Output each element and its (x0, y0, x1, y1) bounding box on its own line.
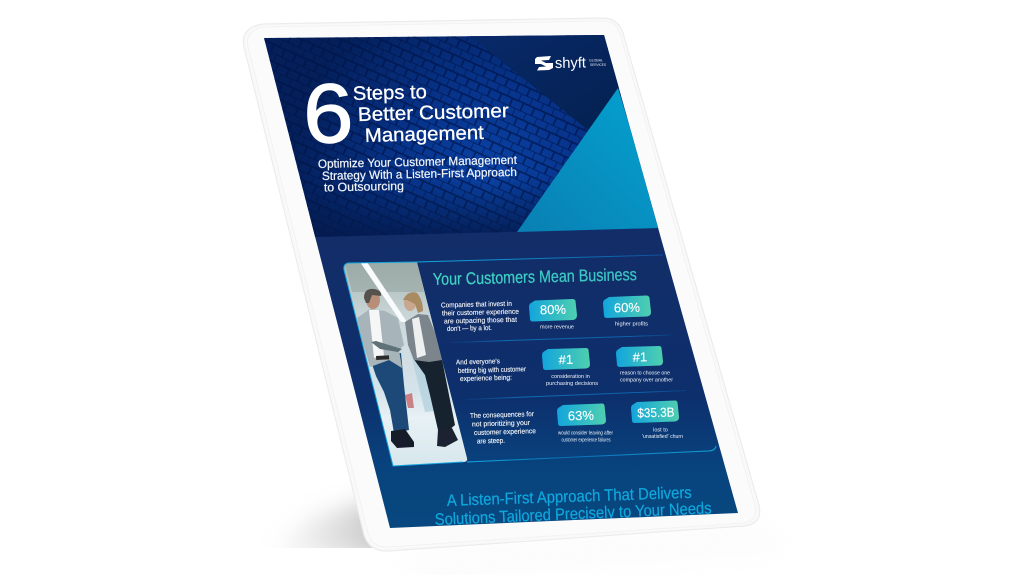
stat: 80% more revenue (529, 299, 577, 330)
stat: #1 consideration in purchasing decisions: #1 (558, 352, 573, 367)
row 3 text: The consequences for (470, 411, 535, 420)
stat: #1 consideration in purchasing decisions: purchasing decisions (546, 381, 598, 387)
divider line (466, 390, 686, 400)
panel: your customers mean business (340, 255, 716, 470)
closing heading: Solutions Tailored Precisely to Your Needs (434, 499, 712, 529)
stat: $35.3B lost to unsatisfied churn (631, 400, 683, 440)
woman head (404, 300, 416, 311)
stat: 60% higher profits: 60% (614, 300, 641, 315)
heading: Better Customer (358, 100, 510, 126)
stat: #1 reason to choose one company over another (616, 346, 673, 384)
row 1 text (441, 301, 519, 333)
row 1 text: Companies that invest in (441, 301, 512, 309)
stat: #1 reason to choose one company over another: company over another (620, 378, 673, 384)
row 2 text: And everyone's (456, 358, 500, 366)
stat: $35.3B lost to unsatisfied churn: lost to (653, 428, 668, 434)
row 2 text: betting big with customer (458, 366, 527, 375)
man shirt (369, 310, 384, 358)
heading: Management (365, 122, 485, 147)
stat: #1 reason to choose one company over another: reason to choose one (620, 370, 670, 376)
row 1 text: their customer experience (442, 309, 519, 317)
tablet mockup scene (243, 18, 760, 552)
woman (403, 292, 458, 447)
logo wordmark: shyft (555, 54, 587, 72)
man head (366, 295, 380, 309)
stat: 63% would consider leaving (557, 404, 613, 444)
row 2 text: experience being: (460, 375, 512, 383)
logo tagline (589, 59, 606, 66)
stat: 63% would consider leaving: would consider leaving after (557, 430, 613, 436)
panel: header banner (262, 32, 662, 237)
header navy wedge (470, 33, 620, 130)
tablet screen (260, 32, 750, 535)
man shoes (391, 429, 414, 448)
logo: shyft (535, 56, 606, 71)
woman blouse (412, 317, 426, 358)
stat: 80% more revenue: more revenue (540, 324, 574, 330)
stat: $35.3B lost to unsatisfied churn: $35.3B (637, 404, 675, 421)
divider line (451, 335, 671, 342)
stat: #1 consideration in purchasing decisions: consideration in (551, 374, 590, 380)
woman trousers (413, 354, 455, 432)
numeral 6: 6 (302, 66, 354, 161)
closing heading (434, 484, 712, 529)
heading: Steps to (353, 81, 427, 105)
panel edge lines (417, 255, 716, 462)
man (357, 289, 414, 448)
subheading (318, 156, 517, 192)
stat: 63% would consider leaving: 63% (568, 408, 595, 423)
row 3 text: are steep. (477, 438, 505, 445)
subheading: Strategy With a Listen-First Approach (322, 165, 517, 183)
stat: 80% more revenue: 80% (540, 302, 567, 317)
row 3 text: not prioritizing your (472, 420, 531, 428)
stat: #1 reason to choose one company over another: #1 (632, 349, 647, 365)
photo outline (344, 262, 463, 466)
stat: 60% higher profits (603, 296, 651, 328)
photo: two colleagues walking with a tablet (340, 260, 470, 470)
heading (354, 86, 508, 145)
stat: $35.3B lost to unsatisfied churn: 'unsatisfied' churn (642, 434, 683, 440)
held tablet (371, 341, 402, 352)
subheading: Optimize Your Customer Management (318, 153, 518, 171)
tablet body (243, 18, 760, 551)
tablet shadow (293, 496, 372, 548)
row 1 text: are outpacing those that (444, 317, 517, 325)
closing heading: A Listen-First Approach That Delivers (447, 484, 692, 510)
row 2 text (456, 358, 527, 383)
logo tagline: SERVICES (590, 63, 607, 67)
title: Your Customers Mean Business (433, 265, 637, 289)
logo icon (535, 56, 553, 70)
row 3 text: customer experience (474, 428, 536, 437)
row 3 text (470, 411, 536, 445)
screen body background (312, 225, 738, 528)
woman shoes (437, 428, 458, 447)
stat: 63% would consider leaving: customer experience failures (562, 438, 611, 444)
header patterned background (262, 32, 662, 237)
man jacket (357, 309, 404, 368)
subheading: to Outsourcing (324, 179, 404, 194)
woman jacket (405, 314, 442, 362)
man trousers (370, 353, 409, 433)
stat: 60% higher profits: higher profits (615, 322, 648, 328)
logo tagline: GLOBAL (589, 58, 603, 62)
header light blue triangle (517, 88, 660, 232)
stat: #1 consideration in purchasing decisions (542, 348, 598, 387)
row 1 text: don't — by a lot. (447, 325, 492, 333)
